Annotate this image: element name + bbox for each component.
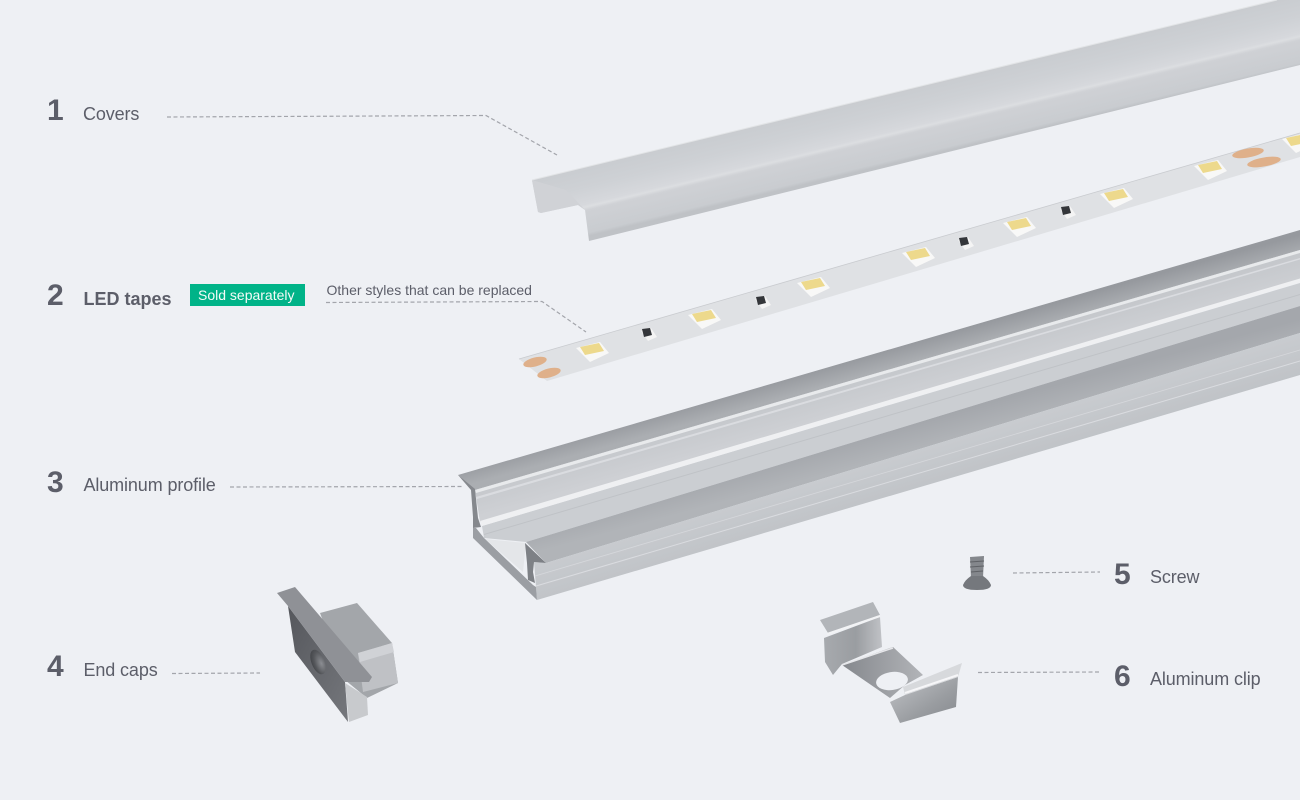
cap top flange — [277, 587, 372, 682]
item 4: end caps: End caps — [84, 660, 158, 680]
badge: sold separately: Sold separately — [198, 287, 295, 303]
item 3: aluminum profile: 3 — [47, 466, 64, 499]
item 5: screw — [1013, 558, 1201, 591]
profile lower wall — [482, 283, 1300, 542]
item 5: screw: Screw — [1150, 567, 1201, 587]
clip right wall — [890, 677, 958, 723]
aluminum clip — [820, 602, 962, 723]
screw — [963, 556, 991, 590]
cover component — [532, 0, 1300, 241]
profile highlight — [480, 278, 1300, 526]
profile front wall — [534, 333, 1300, 600]
badge: sold separately — [190, 284, 305, 306]
copper pads — [522, 146, 1282, 380]
LED tape — [519, 133, 1300, 381]
resistors — [641, 206, 1076, 341]
clip right flange — [903, 663, 962, 695]
item 6: aluminum clip: Aluminum clip — [1150, 669, 1261, 689]
end cap — [277, 587, 398, 722]
clip middle plate — [842, 647, 923, 698]
clip hole — [875, 670, 909, 692]
clip left flange — [820, 602, 880, 633]
tape strip — [519, 133, 1300, 381]
profile cross-section — [458, 475, 481, 528]
item 1: covers: 1 — [47, 94, 64, 127]
item 2: LED tapes — [47, 279, 586, 332]
profile front flange — [526, 306, 1300, 563]
leader line — [167, 116, 557, 155]
item 4: end caps — [47, 650, 260, 683]
leader line — [1013, 572, 1100, 573]
leader line — [172, 672, 260, 674]
leader line — [978, 671, 1100, 674]
item 1: covers — [47, 94, 557, 155]
profile inner wall — [475, 250, 1300, 522]
item 3: aluminum profile — [47, 466, 463, 499]
LED chips — [576, 133, 1300, 362]
item 6: aluminum clip — [978, 660, 1261, 693]
item 6: aluminum clip: 6 — [1114, 660, 1131, 693]
item 2: LED tapes: LED tapes — [84, 289, 172, 309]
profile channel floor — [485, 539, 526, 572]
item 2: LED tapes: 2 — [47, 279, 64, 312]
cap dark face — [288, 606, 348, 722]
item 1: covers: Covers — [83, 104, 139, 124]
profile back flange — [458, 230, 1300, 490]
item 3: aluminum profile: Aluminum profile — [84, 475, 216, 495]
note: other styles: Other styles that can be replaced — [326, 282, 532, 298]
item 4: end caps: 4 — [47, 650, 64, 683]
clip left wall — [824, 617, 882, 675]
cap rear body — [320, 603, 398, 698]
cap lower light face — [345, 683, 368, 722]
item 5: screw: 5 — [1114, 558, 1131, 591]
aluminum profile — [458, 230, 1300, 600]
leader line — [230, 486, 463, 488]
leader line — [326, 302, 586, 332]
cap hole — [307, 648, 329, 676]
